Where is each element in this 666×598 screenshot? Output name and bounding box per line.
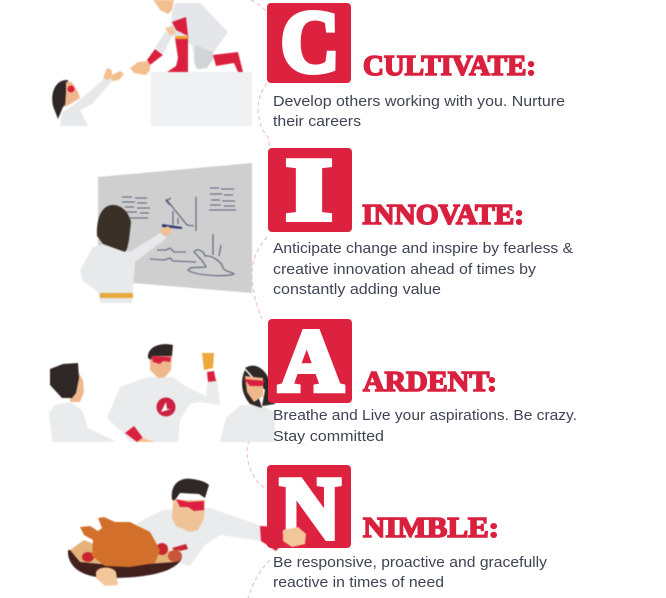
- panel: nimble illustration: [68, 479, 262, 586]
- panel: C cultivate: [267, 0, 565, 130]
- description: [273, 407, 577, 445]
- heading: ARDENT:: [363, 367, 497, 398]
- panel: A ardent: [268, 313, 577, 445]
- description: [273, 240, 573, 298]
- flying hero body: [137, 479, 262, 566]
- cuff and fist over badge: [260, 526, 306, 551]
- description: Stay committed: [273, 428, 384, 445]
- heading: CULTIVATE:: [363, 51, 536, 82]
- man seen from behind: [49, 363, 117, 442]
- whiteboard scribbles: [122, 188, 236, 276]
- woman drawing on board: [80, 205, 182, 303]
- badge N: N: [280, 461, 340, 558]
- roast turkey on platter: [68, 517, 182, 586]
- panel: cultivate illustration: [52, 0, 252, 126]
- dashed connector line: [247, 0, 270, 598]
- description: reactive in times of need: [273, 574, 444, 591]
- kneeling hero: [130, 0, 243, 75]
- woman reaching up: [52, 68, 124, 126]
- panel: innovate illustration: [80, 163, 252, 303]
- description: Develop others working with you. Nurture: [273, 93, 565, 110]
- description: their careers: [273, 113, 361, 130]
- whiteboard: [98, 163, 252, 293]
- description: constantly adding value: [273, 281, 441, 298]
- description: [273, 554, 548, 591]
- panel: I innovate: [268, 142, 573, 298]
- hero raising cup: [107, 344, 220, 442]
- pedestal block: [151, 72, 252, 126]
- description: Anticipate change and inspire by fearless &: [273, 240, 573, 257]
- badge I: I: [286, 142, 332, 239]
- badge I: [268, 142, 352, 239]
- panel: N nimble: [260, 461, 548, 591]
- description: creative innovation ahead of times by: [273, 261, 537, 278]
- woman with mask: [220, 366, 275, 442]
- description: [273, 93, 565, 130]
- heading: NIMBLE:: [363, 513, 499, 544]
- description: Breathe and Live your aspirations. Be crazy.: [273, 407, 577, 424]
- badge A: A: [279, 313, 343, 410]
- panel: ardent illustration: [49, 344, 275, 442]
- heading: INNOVATE:: [362, 200, 524, 231]
- description: Be responsive, proactive and gracefully: [273, 554, 548, 571]
